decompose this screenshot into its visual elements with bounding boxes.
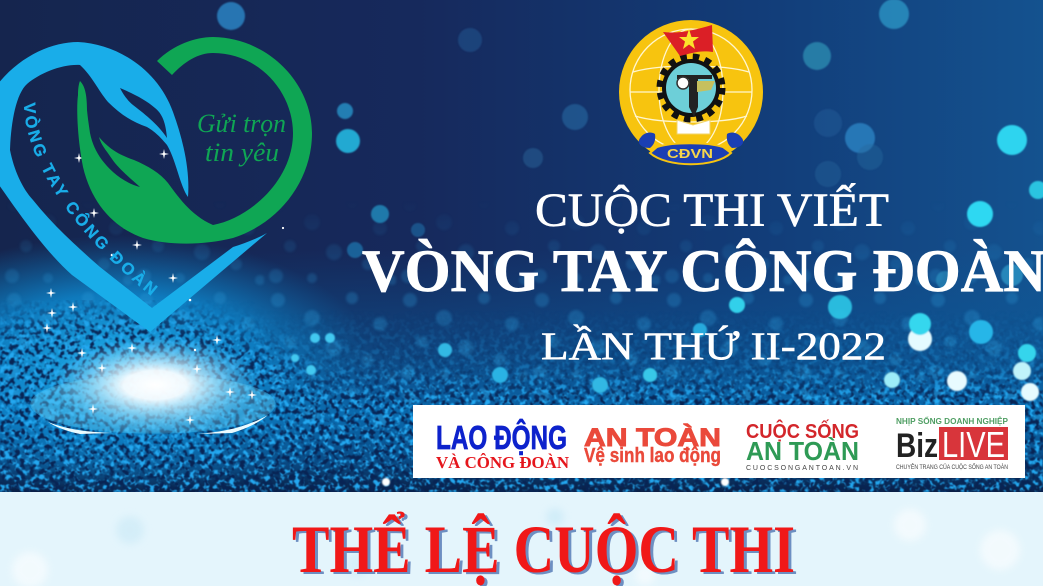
book: [677, 120, 710, 134]
slogan: Gửi trọn tin yêu: tin yêu: [205, 138, 279, 167]
globe lines: [630, 29, 752, 151]
logo: Lao Động và Công đoàn: LAO ĐỘNG: [436, 418, 567, 456]
slogan: Gửi trọn tin yêu: Gửi trọn: [197, 109, 286, 138]
heading: LẦN THỨ II-2022: LẦN THỨ II-2022: [541, 323, 886, 368]
logo: BizLIVE: CHUYÊN TRANG CỦA CUỘC SỐNG AN TOÀN: [896, 463, 1008, 471]
logo: An toàn vệ sinh lao động: Vệ sinh lao động: [584, 445, 721, 467]
bottom title band: THỂ LỆ CUỘC THI: [292, 511, 795, 586]
sponsor strip: [413, 405, 1025, 478]
sparkle stars: [42, 149, 284, 425]
logo: Cuộc sống an toàn: CUỘC SỐNG: [746, 419, 859, 443]
heading: VÒNG TAY CÔNG ĐOÀN: VÒNG TAY CÔNG ĐOÀN: [362, 238, 1043, 304]
heart logo: Vòng tay Công đoàn: [0, 37, 312, 332]
logo: BizLIVE: NHỊP SỐNG DOANH NGHIỆP: [896, 416, 1009, 426]
slogan: Gửi trọn tin yêu: [197, 109, 286, 167]
logo: BizLIVE: Biz: [896, 427, 938, 465]
gear: [662, 59, 720, 117]
flag with star: [663, 25, 713, 56]
light flare and glowing ring: [31, 149, 284, 434]
curved name: VÒNG TAY CÔNG ĐOÀN: [24, 103, 160, 303]
heart: green leaf and ring: [77, 37, 312, 244]
logo: BizLIVE: LIVE: [942, 424, 1005, 465]
logo: An toàn vệ sinh lao động: AN TOÀN: [584, 423, 721, 452]
emblem: Công đoàn Việt Nam: [619, 20, 763, 164]
bottom title band: [0, 492, 1043, 586]
cyan globe with tools: [666, 63, 716, 113]
logo: Cuộc sống an toàn: [746, 419, 859, 472]
banner CĐVN: [650, 143, 731, 164]
logo: Lao Động và Công đoàn: [436, 418, 570, 472]
heart logo: Vòng tay Công đoàn: VÒNG TAY CÔNG ĐOÀN: [24, 102, 158, 296]
logo: BizLIVE: [896, 416, 1009, 471]
logo: Cuộc sống an toàn: AN TOÀN: [746, 436, 859, 466]
logo: An toàn vệ sinh lao động: [584, 423, 721, 467]
heart: blue hand: [0, 42, 267, 332]
logo: Cuộc sống an toàn: CUOCSONGANTOAN.VN: [746, 465, 858, 472]
heading: CUỘC THI VIẾT: CUỘC THI VIẾT: [535, 182, 889, 237]
logo: Lao Động và Công đoàn: VÀ CÔNG ĐOÀN: [436, 453, 570, 472]
emblem: Công đoàn Việt Nam: CĐVN: [667, 146, 713, 161]
